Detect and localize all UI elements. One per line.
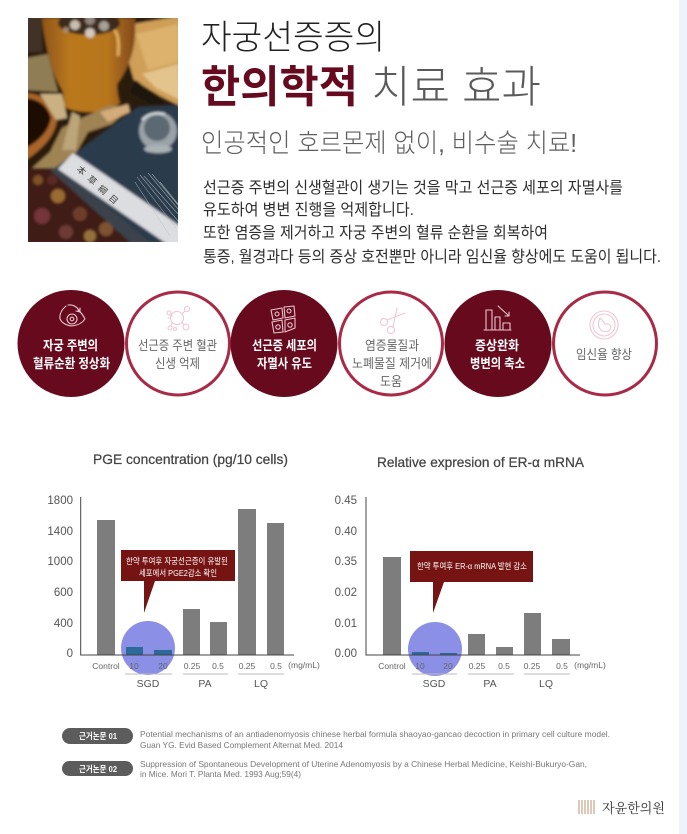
x axis labels: 0.5 <box>498 661 510 671</box>
reference 02: Suppression of Spontaneous Development of Uterine Adenomyosis by a Chinese Herbal Medicine, Keishi-Bukuryo-Gan, <box>140 759 587 769</box>
chart: ER-alpha mRNA <box>335 454 606 690</box>
circle 6: fertility <box>554 292 656 395</box>
group labels <box>412 674 570 690</box>
reference pill <box>62 728 133 744</box>
x axis labels <box>92 660 320 671</box>
y axis labels: 0.01 <box>335 618 357 630</box>
y axis labels: 0.02 <box>335 587 357 599</box>
circle 1: blood flow: 혈류순환 정상화 <box>33 356 110 371</box>
y axis labels: 1400 <box>47 526 73 538</box>
right side strip <box>679 0 687 834</box>
axes <box>81 497 294 655</box>
title line 1: 자궁선증증의 <box>201 19 385 57</box>
circle 2: angiogenesis: 선근증 주변 혈관 <box>138 338 217 353</box>
circle 4: inflammation <box>340 292 442 395</box>
body text: 통증, 월경과다 등의 증상 호전뿐만 아니라 임신율 향상에도 도움이 됩니다. <box>203 248 661 266</box>
axes <box>366 497 580 655</box>
panel: effect circles <box>18 290 656 397</box>
icon: fetus <box>590 311 618 339</box>
circle 3: apoptosis: 자멸사 유도 <box>257 356 312 371</box>
y axis labels: 0.45 <box>335 495 357 507</box>
y axis labels <box>335 495 357 660</box>
book <box>52 105 180 244</box>
callout <box>121 550 235 613</box>
photo: herbal medicine still life <box>26 11 180 244</box>
x axis labels: 0.25 <box>184 661 201 671</box>
book label <box>58 153 180 244</box>
herbs bottom <box>26 168 130 244</box>
x axis labels: 10 <box>129 661 139 671</box>
body text: 선근증 주변의 신생혈관이 생기는 것을 막고 선근증 세포의 자멸사를 <box>203 179 623 197</box>
icon: uterus orbit <box>60 305 85 326</box>
bars <box>97 509 284 655</box>
y axis labels: 1000 <box>47 556 73 568</box>
icon: network nodes <box>167 306 190 330</box>
callout: 세포에서 PGE2감소 확인 <box>139 568 217 578</box>
paper bundle <box>128 16 180 106</box>
group labels: LQ <box>539 678 553 690</box>
circle 5: symptom relief: 증상완화 <box>475 338 519 353</box>
group labels: SGD <box>137 678 160 690</box>
circle 4: inflammation: 노폐물질 제거에 <box>352 356 432 371</box>
y axis labels: 0.00 <box>335 648 357 660</box>
icon: falling bars <box>484 306 511 330</box>
glass jar <box>139 112 177 150</box>
highlight circle <box>121 621 175 675</box>
logo: 자윤한의원 <box>602 800 665 816</box>
mortar <box>42 18 135 112</box>
title emphasis: 한의학적 <box>201 63 358 112</box>
logo <box>579 800 665 816</box>
group labels: SGD <box>423 678 446 690</box>
body text <box>203 179 661 266</box>
circle 3: apoptosis: 선근증 세포의 <box>252 338 317 353</box>
book title characters: 本草綱目 <box>75 163 121 206</box>
circle 1: blood flow: 자궁 주변의 <box>43 338 98 353</box>
title line 2 <box>201 63 541 112</box>
x axis labels: (mg/mL) <box>288 660 320 670</box>
callout: 한약 투여후 자궁선근증이 유발된 <box>126 556 228 566</box>
reference pill <box>62 761 133 776</box>
reference 02: in Mice. Mori T. Planta Med. 1993 Aug;59(4) <box>140 769 301 779</box>
circle 1: blood flow <box>18 290 124 397</box>
y axis labels: 400 <box>54 618 73 630</box>
callout: 한약 투여후 ER-α mRNA 발현 감소 <box>417 561 527 571</box>
chart title: PGE concentration (pg/10 cells) <box>93 451 288 467</box>
y axis labels: 600 <box>54 587 73 599</box>
reference 01: 근거논문 01 <box>79 731 117 741</box>
group labels: PA <box>483 678 497 690</box>
bowl <box>26 93 57 160</box>
circle 2: angiogenesis: 신생 억제 <box>155 356 200 371</box>
reference 02 <box>62 759 587 779</box>
icon: scissors <box>380 308 405 334</box>
x axis labels: 0.25 <box>239 661 256 671</box>
reference 01: Guan YG. Evid Based Complement Alternat Med. 2014 <box>140 740 343 750</box>
x axis labels: 20 <box>443 661 453 671</box>
body text: 또한 염증을 제거하고 자궁 주변의 혈류 순환을 회복하여 <box>203 224 548 242</box>
x axis labels: Control <box>378 661 406 671</box>
dried root sticks <box>30 105 130 178</box>
icon: cells <box>271 306 295 333</box>
highlighted bars <box>412 652 457 655</box>
y axis labels: 0.40 <box>335 526 357 538</box>
icon: logo bars <box>579 800 594 814</box>
x axis labels: (mg/mL) <box>574 660 606 670</box>
x axis labels <box>378 660 606 671</box>
subtitle: 인공적인 호르몬제 없이, 비수술 치료! <box>201 128 577 158</box>
reference 02: 근거논문 02 <box>79 764 117 774</box>
x axis labels: Control <box>92 661 120 671</box>
reference 01 <box>62 728 610 750</box>
title remainder: 치료 효과 <box>371 63 541 112</box>
bars <box>383 557 570 655</box>
circle 2: angiogenesis <box>126 292 230 395</box>
group labels: LQ <box>254 678 268 690</box>
x axis labels: 0.25 <box>469 661 486 671</box>
circle 3: apoptosis <box>230 290 338 397</box>
y axis labels <box>47 495 73 660</box>
y axis labels: 0 <box>67 648 73 660</box>
reference 01: Potential mechanisms of an antiadenomyosis chinese herbal formula shaoyao-gancao decoction in primary cell culture model. <box>140 729 610 739</box>
acupuncture needles <box>135 173 178 236</box>
circle 6: fertility: 임신율 향상 <box>576 347 632 362</box>
group labels: PA <box>198 678 212 690</box>
circle 4: inflammation: 도움 <box>380 374 402 389</box>
x axis labels: 20 <box>158 661 168 671</box>
x axis labels: 0.5 <box>212 661 224 671</box>
x axis labels: 0.5 <box>556 661 568 671</box>
x axis labels: 0.5 <box>270 661 282 671</box>
x axis labels: 0.25 <box>524 661 541 671</box>
callout <box>410 551 533 613</box>
y axis labels: 1800 <box>47 495 73 507</box>
circle 4: inflammation: 염증물질과 <box>365 338 419 353</box>
highlighted bars <box>126 647 172 655</box>
chart: PGE concentration <box>47 451 320 690</box>
y axis labels: 0.35 <box>335 556 357 568</box>
chart title: Relative expresion of ER-α mRNA <box>377 454 585 470</box>
body text: 유도하여 병변 진행을 억제합니다. <box>203 201 414 219</box>
circle 5: symptom relief <box>444 290 552 397</box>
x axis labels: 10 <box>415 661 425 671</box>
group labels <box>125 674 284 690</box>
highlight circle <box>408 622 462 676</box>
circle 5: symptom relief: 병변의 축소 <box>470 356 525 371</box>
